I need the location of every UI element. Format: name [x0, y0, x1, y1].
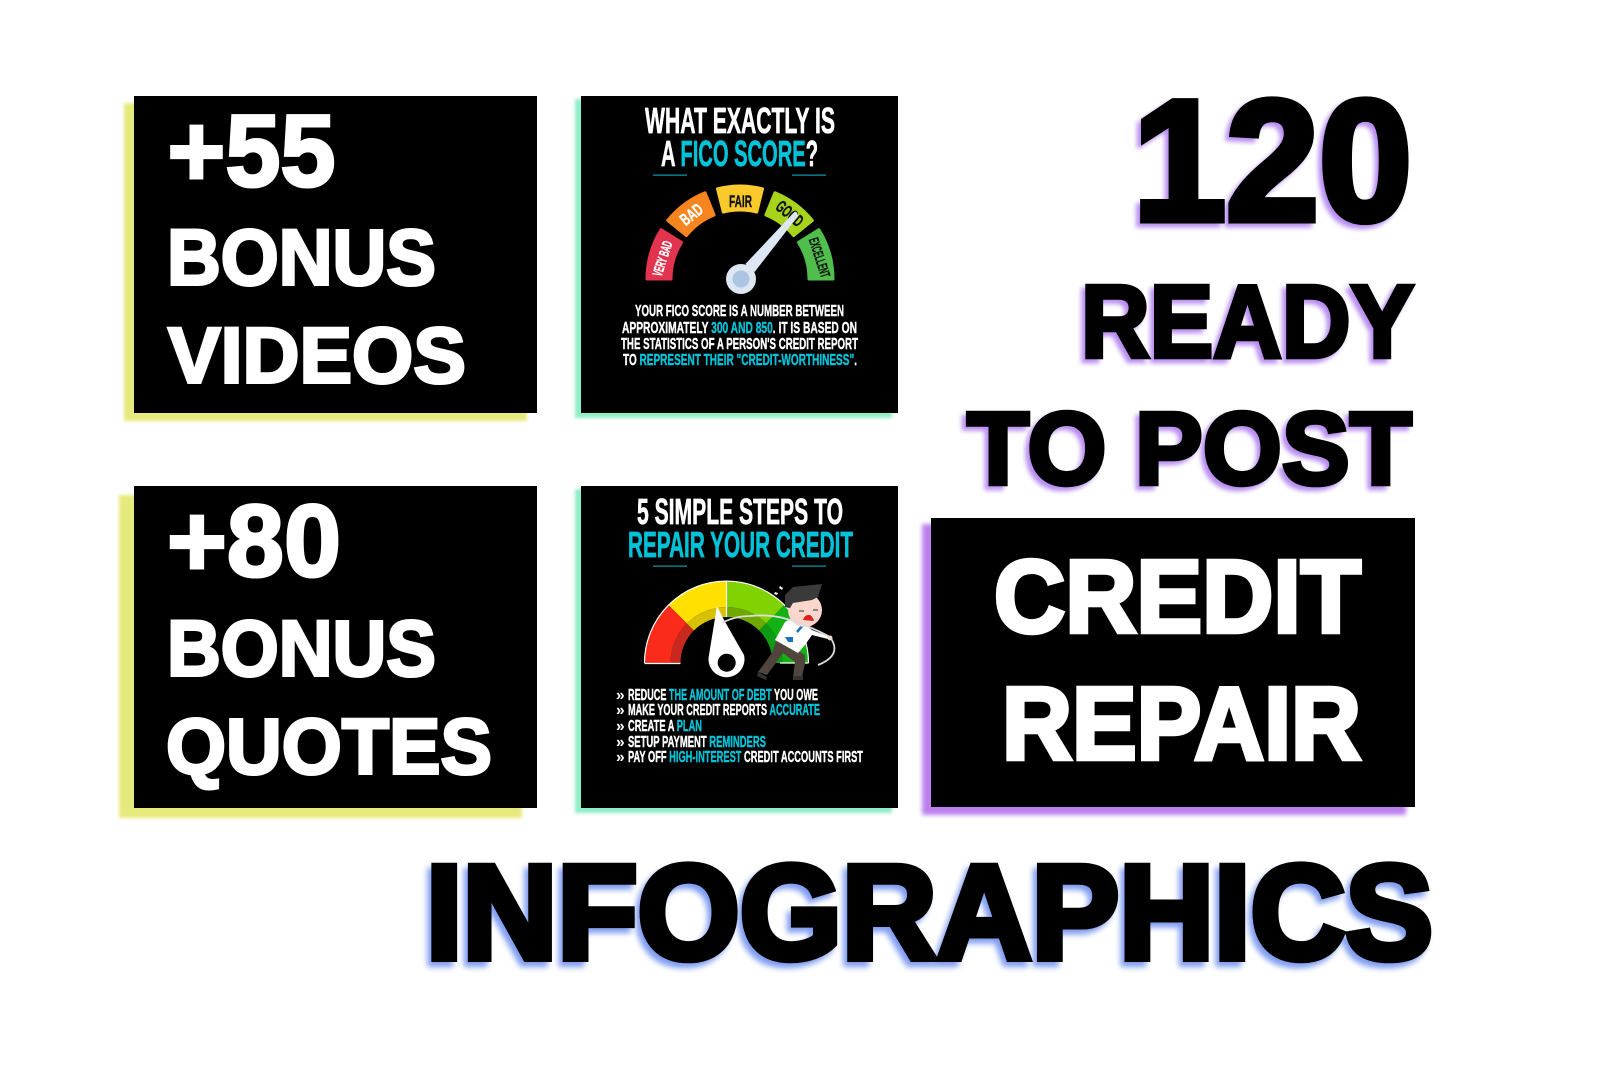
heading: infographics: INFOGRAPHICS — [426, 838, 1433, 988]
chart: credit gauge — [644, 581, 834, 680]
text: bonus: BONUS — [167, 604, 436, 692]
panel: +80 bonus quotes — [119, 484, 537, 818]
icon: gauge needle — [708, 606, 744, 677]
icon: rope — [722, 615, 834, 665]
panel: 5 simple steps to repair your credit — [575, 486, 898, 813]
text: FICO description: YOUR FICO SCORE IS A NUMBER BETWEEN — [635, 303, 844, 320]
text: steps list: CREATE A PLAN — [628, 718, 702, 735]
text: steps list: » — [616, 718, 625, 735]
heading: +80: +80 — [167, 484, 341, 598]
title: what exactly is: WHAT EXACTLY IS — [645, 100, 835, 141]
title: a FICO score: A FICO SCORE? — [661, 133, 818, 174]
text: steps list: REDUCE THE AMOUNT OF DEBT YOU OWE — [628, 687, 818, 704]
text: steps list: » — [616, 734, 625, 751]
label: bad: BAD — [676, 200, 707, 230]
text: quotes: QUOTES — [166, 702, 492, 790]
label: fair: FAIR — [729, 192, 752, 211]
text: ready: READY — [1081, 264, 1414, 379]
text: FICO description: APPROXIMATELY 300 AND 850. IT IS BASED ON — [622, 320, 857, 337]
title: 5 simple steps to: 5 SIMPLE STEPS TO — [637, 491, 843, 532]
icon: gauge needle — [726, 212, 798, 294]
icon: businessman pulling the needle — [757, 584, 832, 680]
text: steps list: MAKE YOUR CREDIT REPORTS ACCURATE — [628, 702, 820, 719]
number: 120: 120 — [1133, 65, 1412, 257]
heading: +55: +55 — [168, 94, 336, 208]
text: steps list: » — [616, 749, 625, 766]
text: FICO description — [621, 303, 858, 369]
panel: what exactly is a FICO score — [575, 96, 898, 418]
title: repair your credit: REPAIR YOUR CREDIT — [628, 524, 853, 565]
panel: +55 bonus videos — [124, 94, 537, 421]
text: FICO description: TO REPRESENT THEIR "CREDIT-WORTHINESS". — [623, 352, 857, 369]
chart: FICO score gauge — [647, 186, 834, 294]
panel: credit repair — [922, 518, 1415, 815]
text: to post: TO POST — [967, 391, 1412, 506]
text: steps list: » — [616, 687, 625, 704]
text: videos: VIDEOS — [168, 312, 466, 400]
label: excellent: EXCELLENT — [806, 235, 834, 280]
label: very bad: VERY BAD — [649, 239, 675, 278]
text: credit: CREDIT — [994, 539, 1361, 654]
text: repair: REPAIR — [1002, 666, 1361, 781]
text: steps list: » — [616, 702, 625, 719]
text: bonus: BONUS — [167, 214, 436, 302]
text: FICO description: THE STATISTICS OF A PERSON'S CREDIT REPORT — [621, 336, 858, 353]
label: good: GOOD — [772, 197, 807, 231]
text: steps list: PAY OFF HIGH-INTEREST CREDIT ACCOUNTS FIRST — [628, 749, 863, 766]
heading: 120 ready to post — [967, 65, 1414, 506]
text: steps list: SETUP PAYMENT REMINDERS — [628, 734, 766, 751]
text: steps list — [616, 687, 863, 766]
